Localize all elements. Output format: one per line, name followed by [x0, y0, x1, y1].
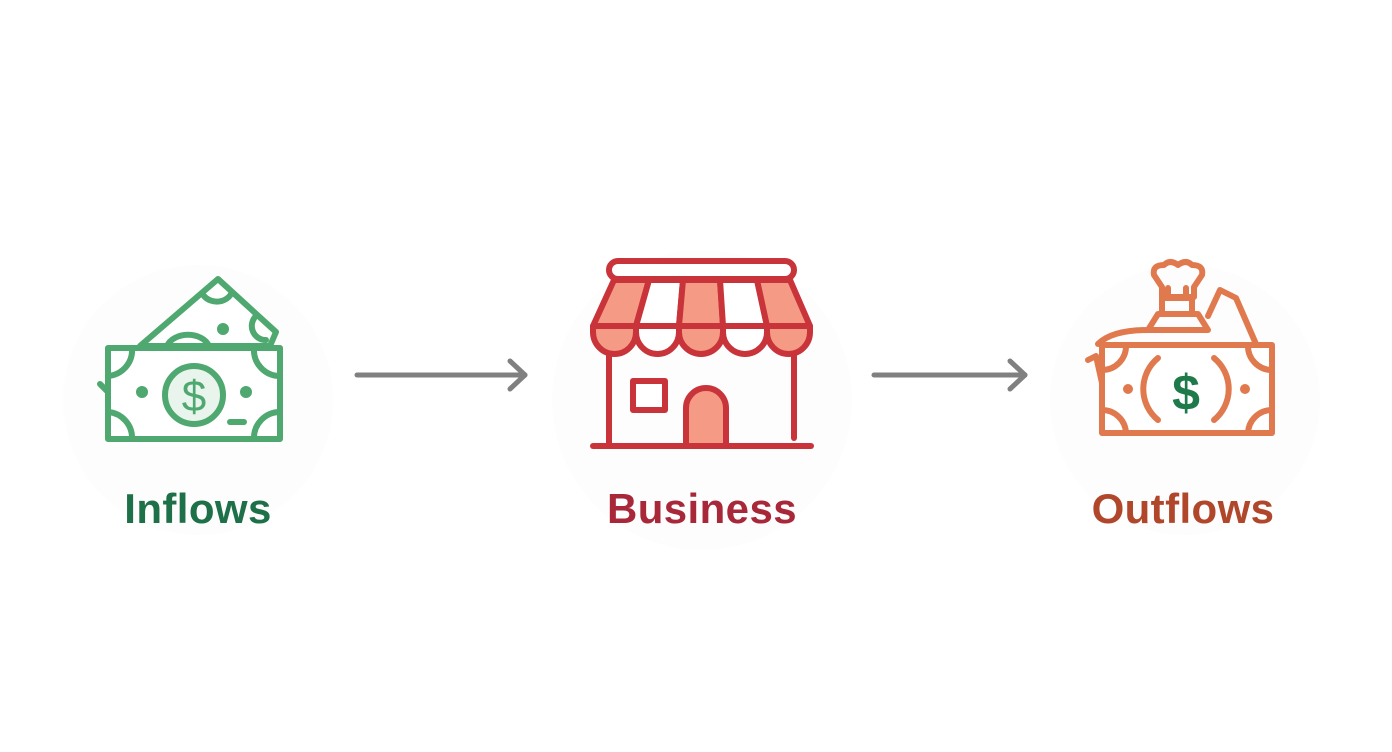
background halo: inflows [63, 265, 333, 535]
icon: outflows money bag [1088, 262, 1272, 433]
background halo: outflows [1050, 265, 1320, 535]
$ in outflows: $ [1172, 365, 1200, 421]
label: Outflows: Outflows [1092, 485, 1274, 532]
label: Inflows: Inflows [124, 485, 272, 532]
arrow 1 [357, 361, 525, 389]
$ in inflows: $ [182, 372, 206, 421]
icon: inflows cash [100, 279, 280, 439]
background halo: business [552, 250, 852, 550]
icon: business storefront [593, 261, 811, 446]
arrow 2 [874, 361, 1025, 389]
label: Business: Business [607, 485, 797, 532]
